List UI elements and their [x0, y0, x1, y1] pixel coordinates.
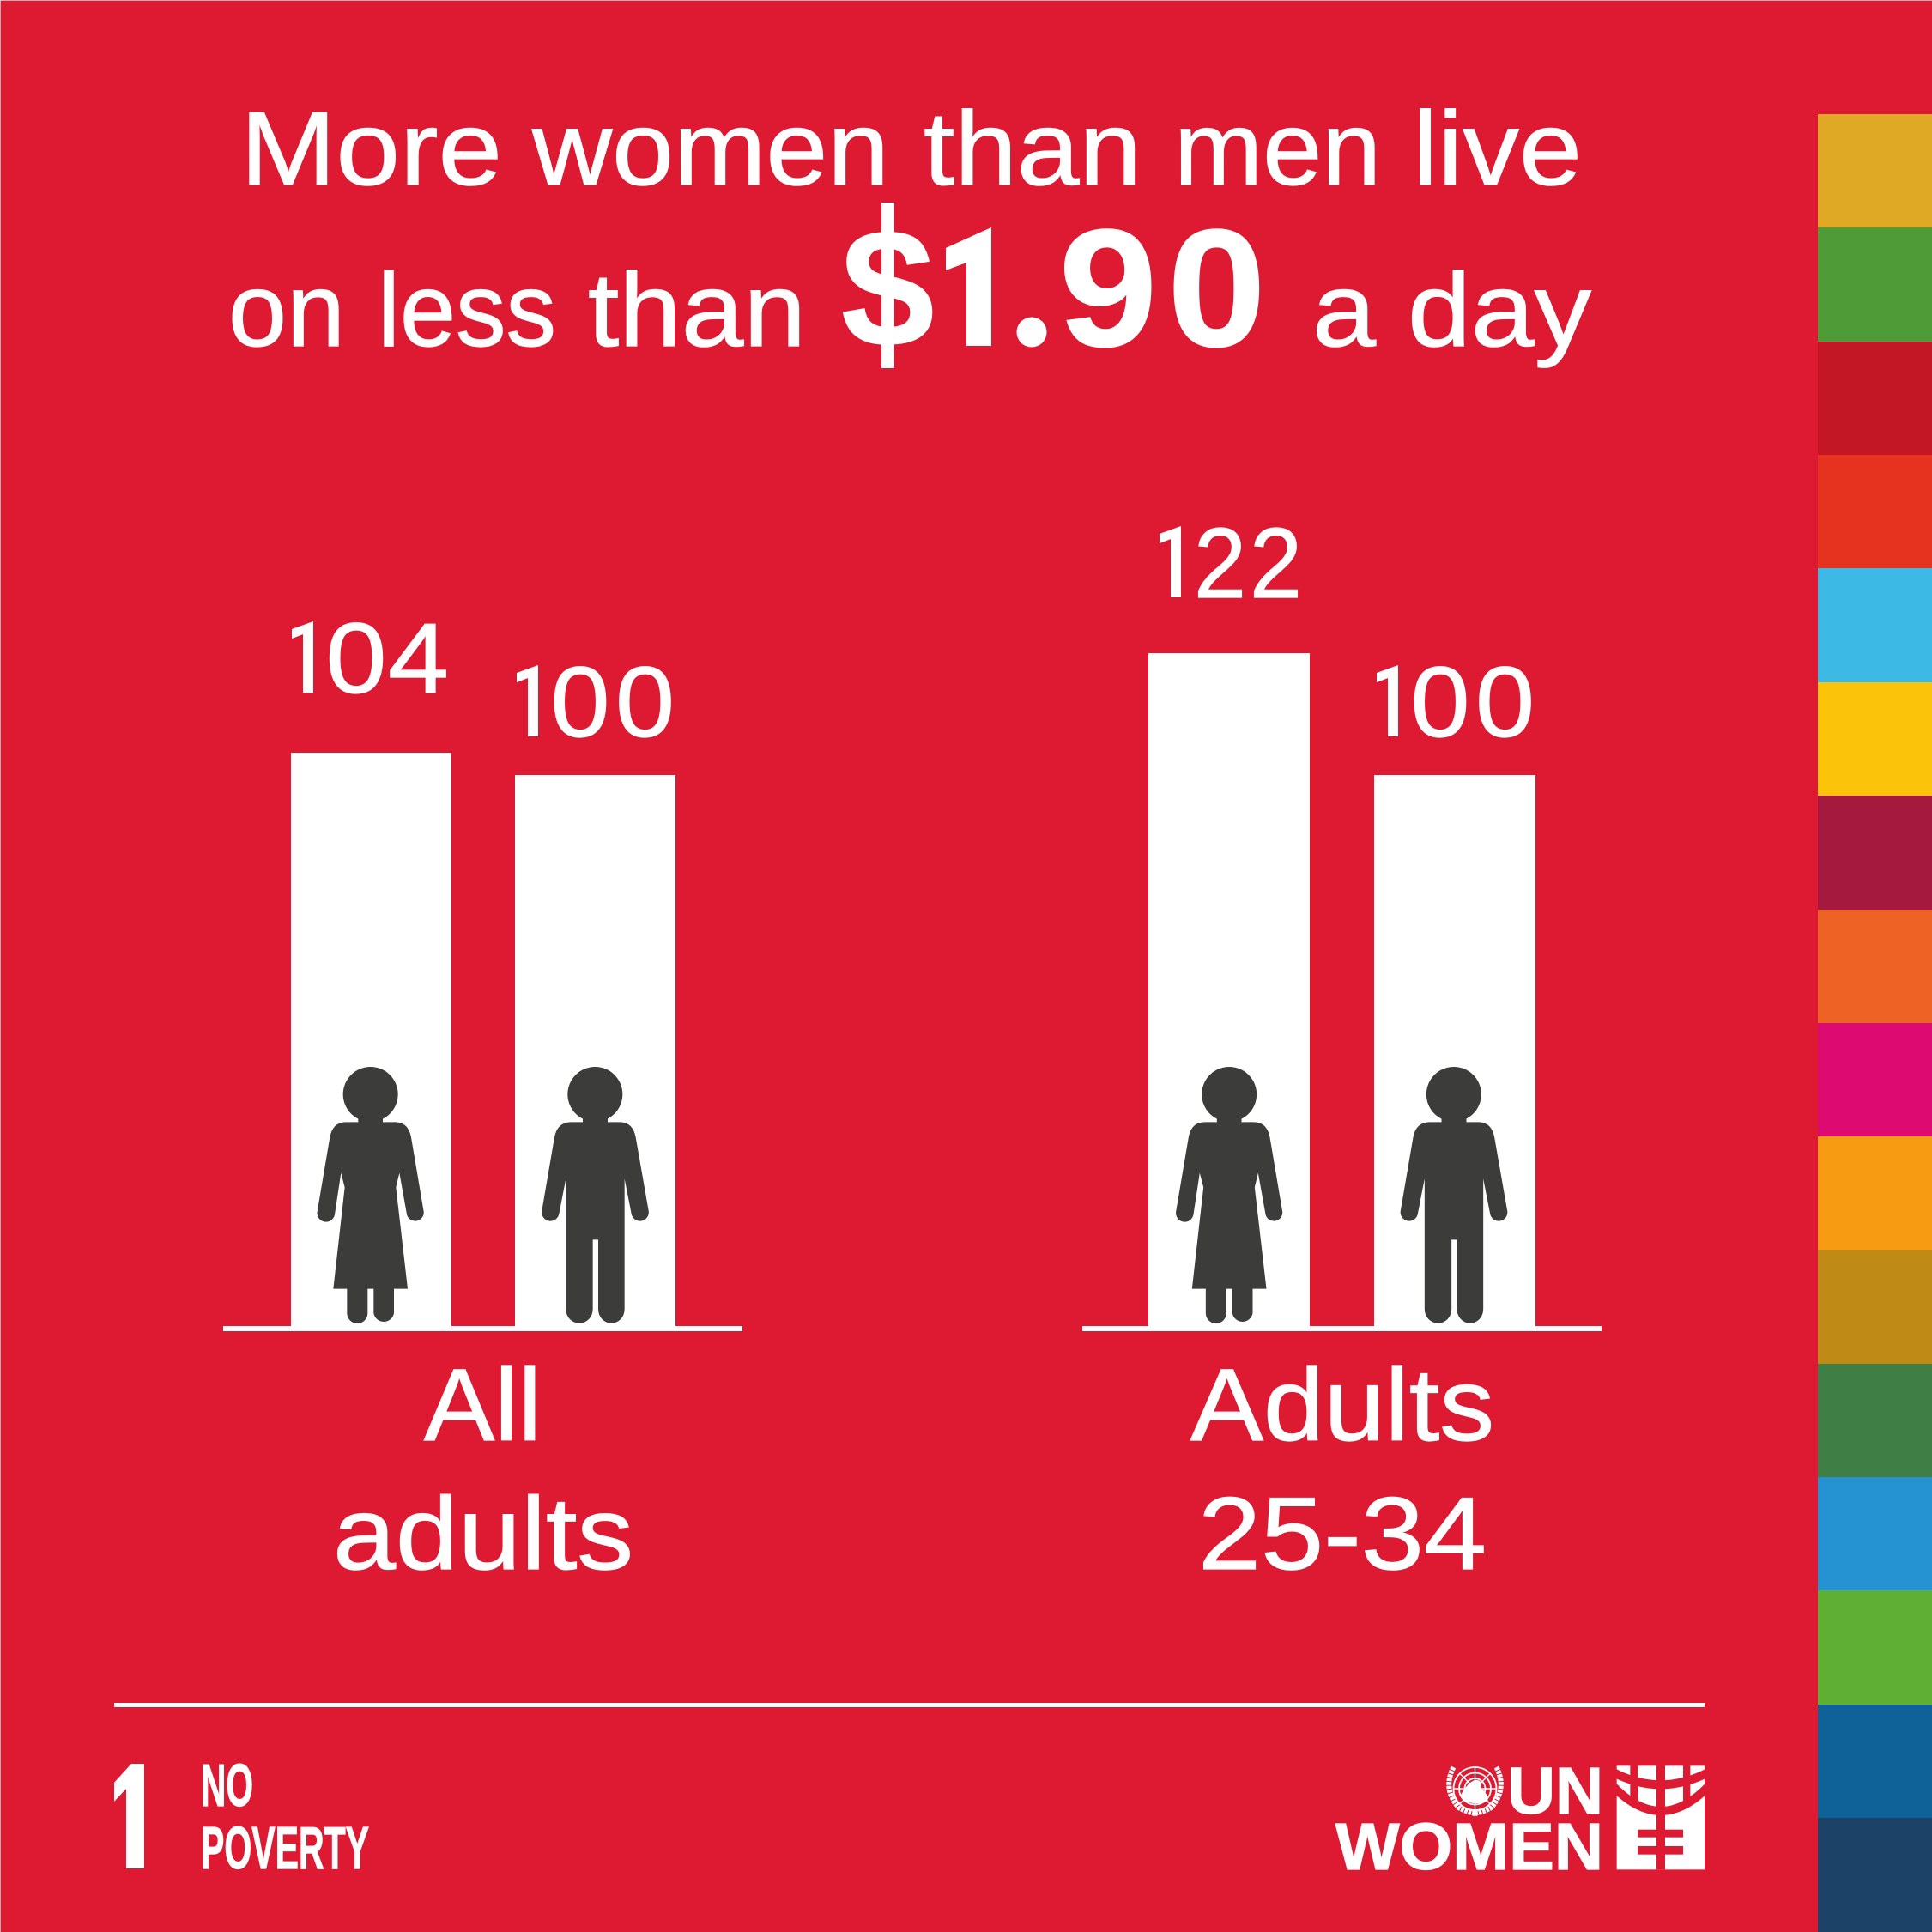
bar chart: adults 25-34 [1082, 507, 1602, 1591]
value: 100: 0 [551, 646, 609, 758]
category label: Adults 25-34: 25-34 [1198, 1476, 1487, 1591]
icon: man [542, 1067, 649, 1323]
category label: Adults 25-34 [1190, 1348, 1494, 1591]
title: than [588, 251, 806, 368]
icon: UN Women symbol [1612, 1764, 1710, 1869]
value: 104: 1 [282, 603, 337, 714]
goal name [201, 1752, 369, 1881]
value: 100 [1377, 665, 1531, 738]
title: on [228, 251, 345, 368]
goal name: NO [201, 1752, 253, 1819]
title: day [1408, 251, 1591, 368]
title highlight: $1.90: 9 [1059, 195, 1157, 382]
category label: All adults [333, 1348, 633, 1591]
icon: man [1401, 1067, 1507, 1323]
title: women [531, 90, 889, 207]
category label: All adults: All [424, 1348, 542, 1463]
value: 122: 1 [1149, 507, 1205, 619]
bar chart: all adults [223, 603, 742, 1591]
SDG colour stripe column [1818, 114, 1932, 1932]
value: 100: 0 [615, 646, 675, 758]
category label: All adults: adults [333, 1476, 633, 1591]
bar: women, all adults [291, 753, 451, 1326]
value: 104: 0 [326, 603, 386, 714]
value: 100: 0 [1411, 646, 1469, 758]
goal name: POVERTY [201, 1814, 369, 1881]
axis line [223, 1326, 742, 1331]
value: 122 [1160, 526, 1298, 598]
value: 122: 2 [1194, 507, 1246, 619]
value: 104 [292, 621, 446, 694]
title: than [924, 90, 1142, 207]
icon: UN emblem [1449, 1767, 1501, 1814]
value: 104: 4 [388, 603, 449, 714]
title: a [1312, 251, 1376, 368]
icon: woman [318, 1067, 424, 1323]
title highlight: $1.90: . [1008, 195, 1055, 382]
bar: women, adults 25-34 [1148, 653, 1310, 1326]
title: less [378, 251, 556, 368]
title highlight: $1.90: 1 [924, 195, 1017, 382]
title [232, 108, 1592, 368]
icon: woman [1176, 1067, 1282, 1323]
UN WOMEN wordmark [1335, 1754, 1603, 1884]
footer divider [114, 1703, 1705, 1707]
bar: men, all adults [515, 775, 675, 1326]
title highlight: $1.90: $ [841, 195, 934, 382]
UN WOMEN wordmark: WOMEN [1335, 1810, 1603, 1884]
title: men [1174, 90, 1381, 207]
UN WOMEN wordmark: UN [1507, 1754, 1603, 1828]
axis line [1082, 1326, 1602, 1331]
value: 100: 1 [506, 646, 562, 758]
category label: Adults 25-34: Adults [1190, 1348, 1494, 1463]
title highlight: $1.90: 0 [1167, 195, 1266, 382]
value: 100 [517, 665, 671, 738]
value: 122: 2 [1250, 507, 1302, 619]
value: 100: 0 [1475, 646, 1535, 758]
title: live [1413, 90, 1582, 207]
value: 100: 1 [1366, 646, 1422, 758]
title: More [240, 90, 502, 207]
title highlight: $1.90 [843, 203, 1260, 368]
goal number: 1 [106, 1735, 151, 1900]
bar: men, adults 25-34 [1374, 775, 1535, 1326]
